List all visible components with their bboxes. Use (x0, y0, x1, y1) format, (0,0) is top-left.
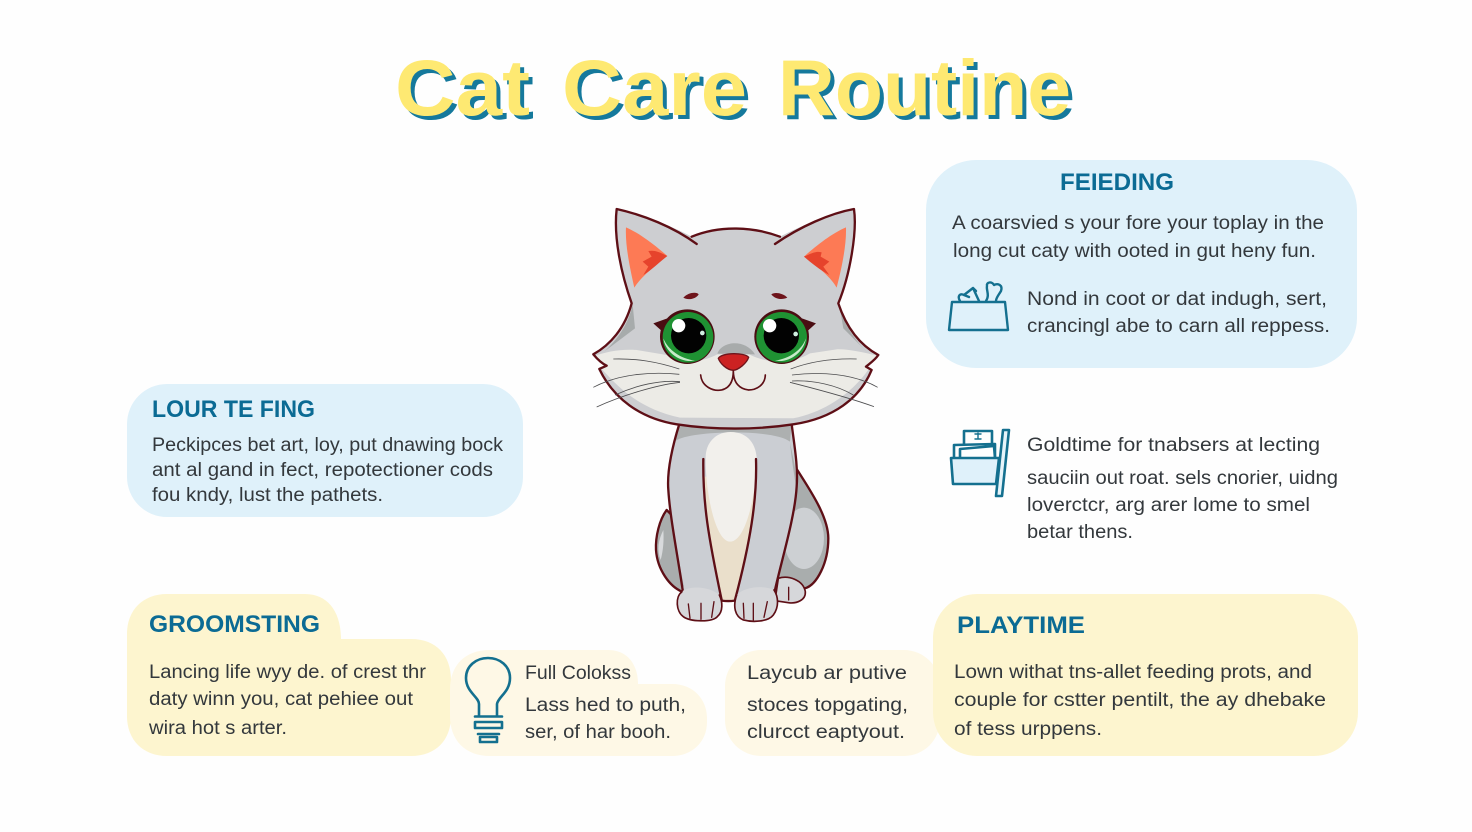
panel: litter (127, 384, 523, 517)
cream belly (703, 477, 757, 600)
text: feeding intro (952, 213, 1324, 262)
text: laycub (747, 663, 908, 743)
text: full colokss (525, 663, 686, 743)
text: playtime side note: loverctcr, arg arer lome to smel (1027, 495, 1310, 516)
icon: folder with papers (951, 430, 1009, 496)
text: grooming body: Lancing life wyy de. of crest thr (149, 662, 427, 683)
back paw (775, 577, 805, 603)
leg outlines (668, 424, 683, 590)
text: full colokss: Full Colokss (525, 663, 631, 684)
head outline (593, 209, 878, 429)
title: Cat (399, 47, 534, 136)
panel: laycub tip (725, 650, 940, 756)
eye left (653, 309, 715, 364)
text: playtime side note: Goldtime for tnabsers at lecting (1027, 435, 1320, 456)
text: laycub: stoces topgating, (747, 695, 908, 716)
text: playtime body: Lown withat tns-allet feeding prots, and (954, 662, 1312, 683)
text: playtime side note (1027, 435, 1338, 543)
text: full colokss: ser, of har booh. (525, 722, 671, 743)
heading: playtime: PLAYTIME (957, 612, 1085, 639)
text: grooming body (148, 662, 427, 739)
panel: full colokss tip (450, 650, 707, 756)
heading: litter: LOUR TE FING (152, 396, 315, 423)
title: Care (566, 47, 751, 136)
text: playtime side note: sauciin out roat. sels cnorier, uidng (1027, 468, 1338, 489)
nose (718, 354, 749, 370)
illustration: cat (593, 209, 880, 621)
whiskers (593, 359, 878, 407)
text: feeding intro: A coarsvied s your fore your toplay in the (952, 213, 1324, 234)
text: feeding detail: Nond in coot or dat indugh, sert, (1027, 289, 1327, 310)
icon: light bulb (466, 658, 510, 742)
text: feeding intro: long cut caty with ooted in gut heny fun. (953, 241, 1316, 262)
text: full colokss: Lass hed to puth, (525, 695, 686, 716)
icon: food bowl with bones (949, 282, 1008, 330)
ears (626, 227, 667, 288)
panel: feeding (926, 160, 1357, 368)
text: playtime body (954, 662, 1326, 740)
text: litter body: Peckipces bet art, loy, put dnawing bock (152, 435, 504, 456)
text: feeding detail (1027, 289, 1330, 337)
title: Routine (782, 47, 1075, 136)
title: Routine (778, 43, 1071, 132)
front paws (677, 588, 722, 621)
text: feeding detail: crancingl abe to carn all reppess. (1027, 316, 1330, 337)
white bib (706, 432, 757, 542)
heading: grooming: GROOMSTING (149, 611, 320, 638)
text: laycub: clurcct eaptyout. (747, 722, 905, 743)
text: playtime side note: betar thens. (1027, 522, 1133, 543)
haunch left (656, 510, 693, 592)
text: playtime body: of tess urppens. (954, 719, 1102, 740)
text: grooming body: daty winn you, cat pehiee out (149, 689, 414, 710)
panel: grooming (127, 594, 451, 756)
title: Cat (395, 43, 530, 132)
heading: feeding: FEIEDING (1060, 169, 1174, 196)
cat head (593, 209, 880, 429)
text: playtime body: couple for cstter pentilt, the ay dhebake (954, 690, 1326, 711)
text: litter body (152, 435, 504, 506)
text: grooming body: wira hot s arter. (148, 718, 287, 739)
chest and legs fill (668, 424, 797, 602)
brows (683, 293, 699, 299)
panel: playtime (933, 594, 1358, 756)
text: litter body: fou kndy, lust the pathets. (152, 485, 383, 506)
shade and muzzle (593, 304, 880, 418)
title (395, 43, 1075, 136)
cat body (656, 424, 828, 621)
mouth (701, 371, 765, 390)
title: Care (562, 43, 747, 132)
text: litter body: ant al gand in fect, repotectioner cods (152, 460, 493, 481)
text: laycub: Laycub ar putive (747, 663, 907, 684)
eye right (754, 309, 816, 364)
haunch right (777, 470, 828, 588)
